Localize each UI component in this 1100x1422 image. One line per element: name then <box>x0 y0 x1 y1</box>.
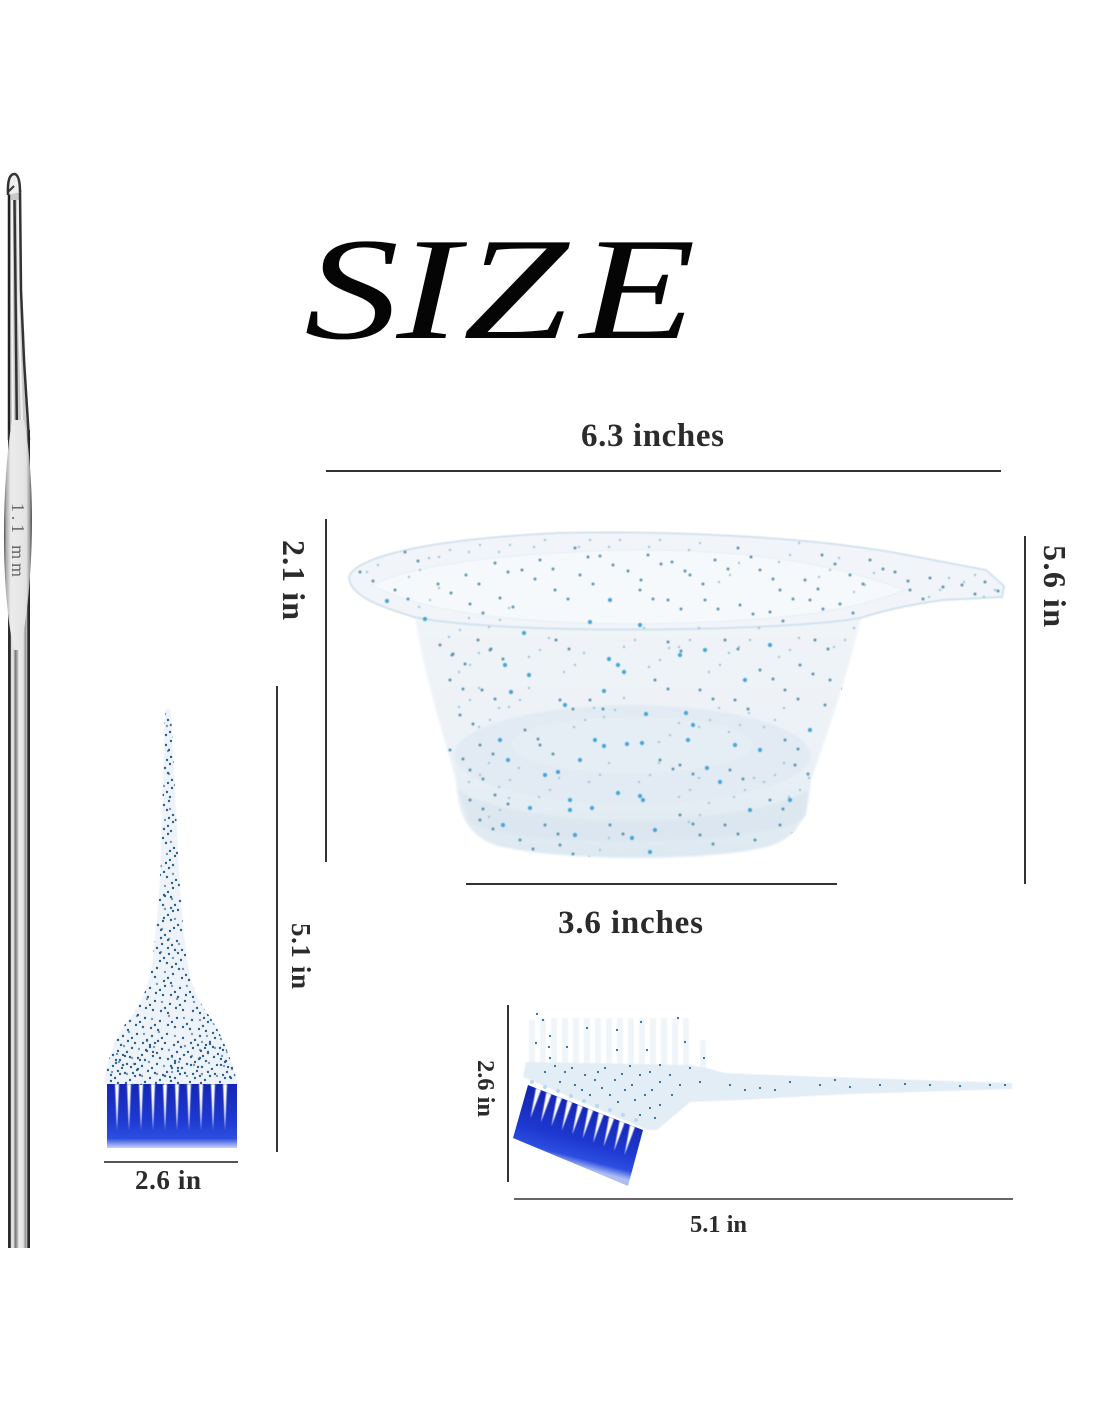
upright brush bristles <box>107 1084 237 1148</box>
bowl body <box>414 612 862 858</box>
dimension: brush length: 5.1 in <box>286 923 316 989</box>
comb teeth <box>532 1018 703 1075</box>
comb brush glitter <box>536 1014 1005 1118</box>
icon: crochet hook <box>4 174 32 1248</box>
bowl floor <box>454 705 810 805</box>
icon: glitter tint bowl <box>349 528 1004 858</box>
comb brush handle <box>523 1062 1012 1130</box>
dimension: brush width: 2.6 in <box>135 1165 201 1195</box>
dimension: brush width <box>104 1161 238 1195</box>
dimension: bowl base width: 3.6 inches <box>558 905 703 941</box>
icon: angled comb brush <box>513 1014 1012 1186</box>
icon: upright tint brush <box>103 708 240 1148</box>
dimension: bowl depth: 2.1 in <box>276 540 312 620</box>
upright brush handle <box>103 708 238 1085</box>
dimension: comb brush height: 2.6 in <box>472 1060 499 1117</box>
hook size label: 1.1 mm <box>8 503 28 577</box>
dimension: bowl top width: 6.3 inches <box>581 418 724 454</box>
dimension: comb brush length: 5.1 in <box>690 1211 747 1238</box>
glitter dots <box>360 528 1004 857</box>
upright brush glitter <box>104 714 240 1087</box>
bowl rim <box>349 532 1004 630</box>
dimension: bowl height right: 5.6 in <box>1037 545 1073 627</box>
title: SIZE <box>304 208 696 370</box>
comb brush bristles <box>513 1085 643 1186</box>
infographic canvas <box>4 172 1066 1248</box>
